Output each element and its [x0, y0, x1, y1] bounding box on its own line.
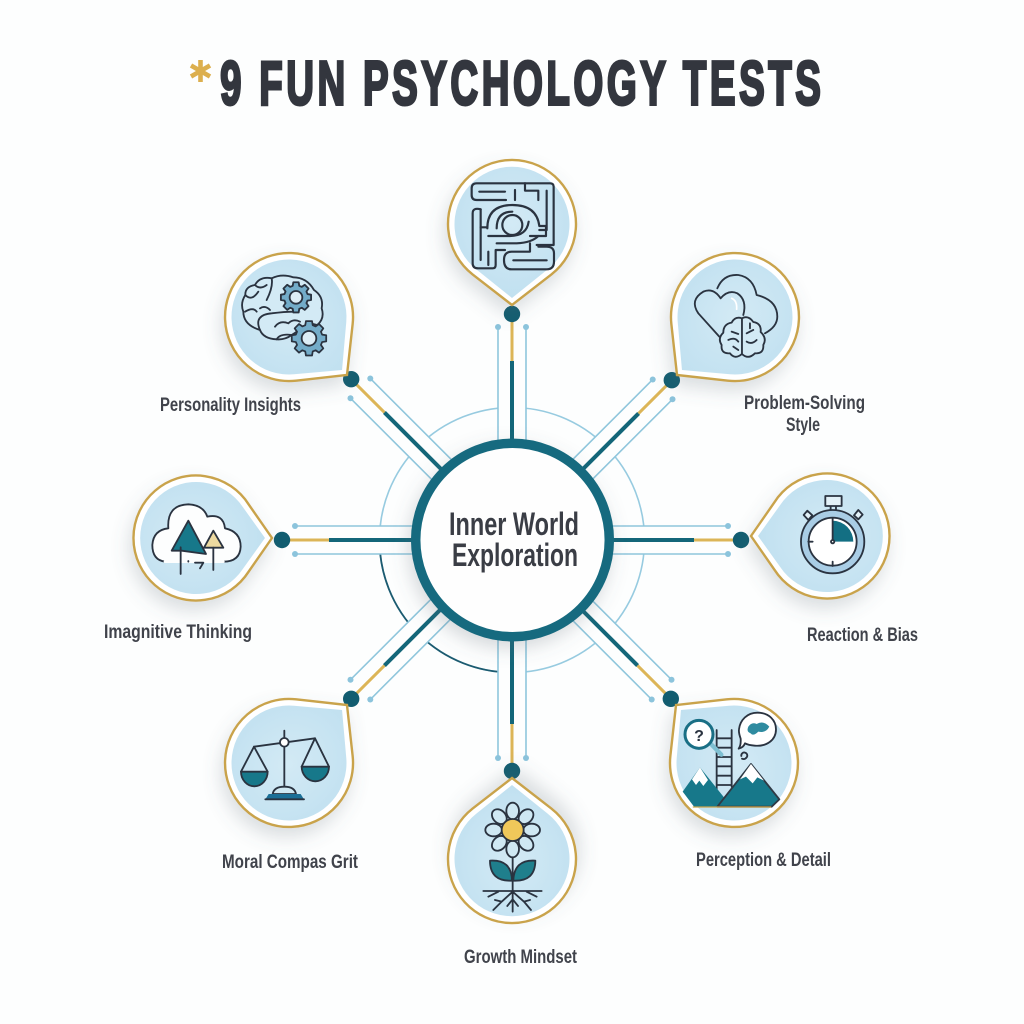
title text: 9 FUN PSYCHOLOGY TESTS: [220, 48, 821, 118]
pin shape: [632, 227, 825, 420]
icon: flower with roots: [483, 803, 542, 912]
label: Style: [786, 415, 820, 436]
connector: upper left: [333, 361, 456, 484]
icon: heart and brain: [695, 275, 777, 357]
connector: top: [495, 306, 529, 445]
label: Imagnitive Thinking: [104, 622, 252, 643]
icon: stopwatch: [801, 496, 864, 573]
pin shape: [199, 660, 392, 853]
icon: question mark: ?: [694, 728, 704, 745]
connector: left: [274, 523, 413, 557]
pin shape: [448, 778, 576, 923]
icon: balance scales: [241, 731, 329, 799]
hub text: line 1: Inner World: [449, 506, 579, 542]
pin shape: [199, 227, 392, 420]
connector spokes: [274, 306, 749, 779]
icon: gold asterisk: [191, 60, 210, 82]
pin shape: [751, 474, 890, 598]
label: Growth Mindset: [464, 947, 578, 968]
connector: lower right: [566, 594, 689, 717]
title: [191, 48, 821, 118]
pin shape: [133, 476, 272, 600]
icon: magnifier, ladder, mountains and speech bubble: [683, 713, 779, 807]
panel: lower left pin (Moral Compas Grit): [199, 660, 392, 873]
pin shape: [631, 660, 824, 853]
orbit ring: [380, 408, 644, 672]
label: Perception & Detail: [696, 850, 831, 871]
icon: brain with gears: [242, 276, 326, 356]
hub text: line 2: Exploration: [452, 537, 578, 573]
panel: upper right pin (Problem-Solving Style): [632, 227, 865, 436]
panel: right pin (Reaction & Bias): [751, 474, 918, 646]
central hub: [416, 443, 609, 637]
icon: maze: [472, 183, 554, 269]
panel: top pin (maze): [448, 160, 576, 305]
icon: cloud with trees: [152, 504, 241, 574]
label: [744, 393, 865, 436]
pin shape: [448, 160, 576, 305]
panel: left pin (Imagnitive Thinking): [104, 476, 272, 643]
panel: upper left pin (Personality Insights): [160, 227, 392, 420]
connector: lower left: [333, 594, 456, 717]
hub ring: [416, 443, 609, 637]
label: Problem-Solving: [744, 393, 865, 414]
label: Reaction & Bias: [807, 625, 918, 646]
connector: right: [610, 523, 749, 557]
panel: lower right pin (Perception & Detail): [631, 660, 831, 871]
connector: upper right: [567, 362, 690, 485]
panel: bottom pin (Growth Mindset): [448, 778, 578, 968]
connector: bottom: [495, 640, 529, 779]
label: Personality Insights: [160, 395, 301, 416]
label: Moral Compas Grit: [222, 852, 359, 873]
